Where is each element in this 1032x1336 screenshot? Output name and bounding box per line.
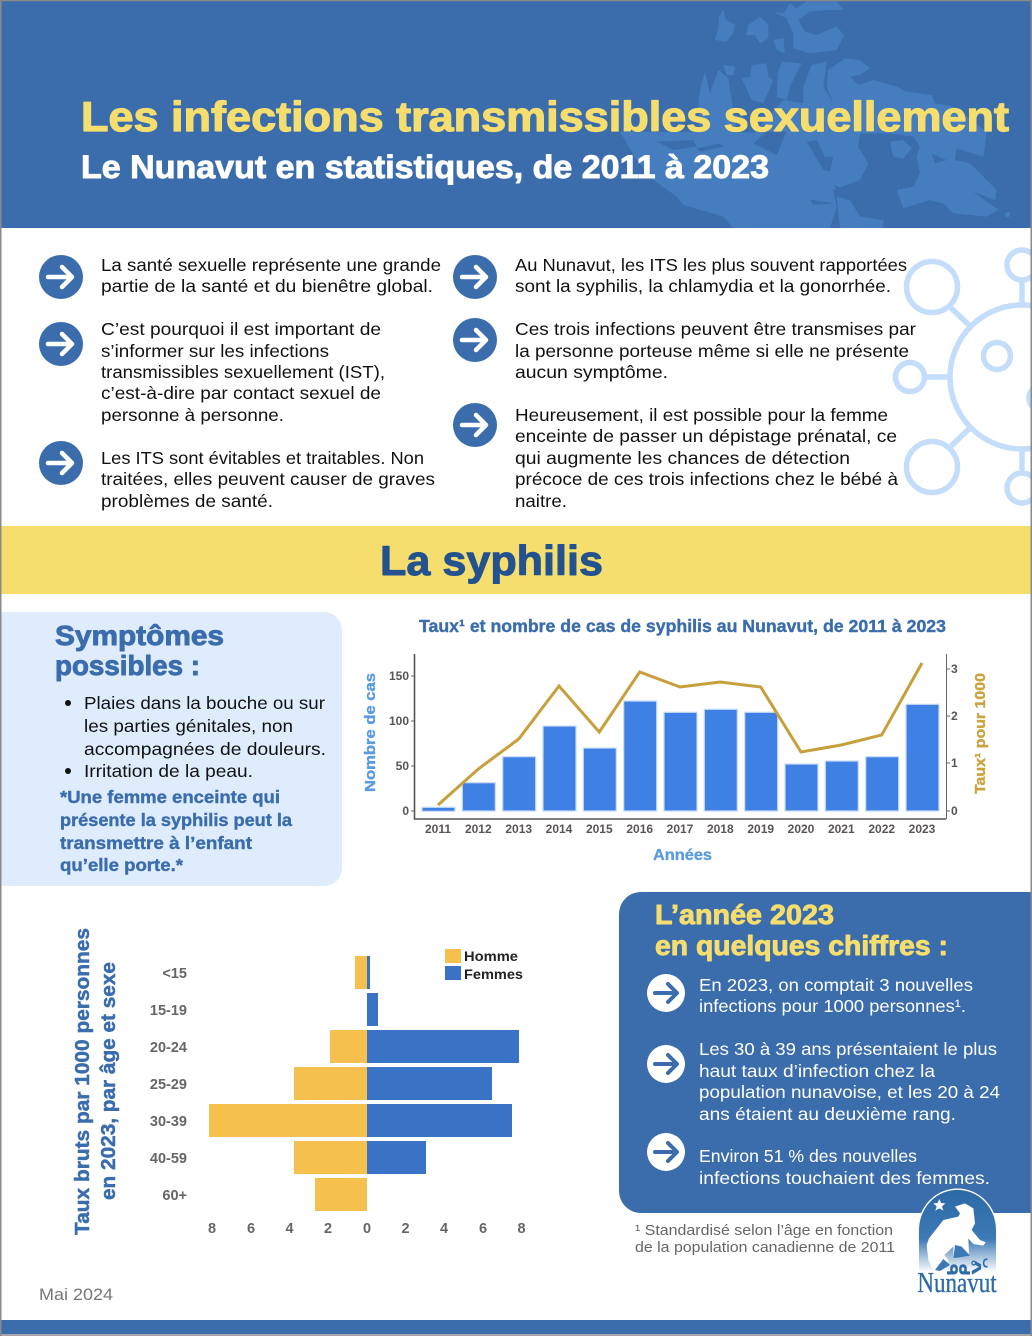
footer band — [0, 1320, 1032, 1334]
text: preventable and treatable: problèmes de santé. — [101, 491, 273, 511]
callout: pregnancy warning: qu’elle porte.* — [60, 855, 183, 875]
section banner: La syphilis: La syphilis — [380, 537, 603, 584]
text: preventable and treatable: Les ITS sont évitables et traitables. Non — [101, 448, 424, 468]
year labels — [425, 822, 936, 836]
text: why be informed: s’informer sur les infections — [101, 341, 329, 361]
age labels: 20-24 — [150, 1040, 187, 1056]
icon: arrow — [647, 974, 685, 1012]
text: most reported STIs: Au Nunavut, les ITS les plus souvent rapportées — [515, 255, 907, 275]
chart: syphilis rate and case count — [363, 616, 989, 864]
value axis labels: 4 — [440, 1221, 448, 1237]
value axis labels: 2 — [401, 1221, 410, 1237]
bars: women — [367, 956, 519, 1174]
year labels: 2011 — [425, 822, 451, 836]
value axis labels: 6 — [247, 1221, 255, 1237]
year labels: 2020 — [788, 822, 815, 836]
heading: symptoms: possibles : — [55, 650, 200, 681]
icon: arrow — [453, 318, 497, 362]
heading: 2023 in numbers — [655, 899, 948, 961]
chart: rates by age and sex pyramid — [72, 928, 526, 1237]
right axis labels: 0 — [951, 804, 958, 818]
line: rate per 1000 — [438, 663, 922, 805]
text: age groups: haut taux d’infection chez la — [699, 1061, 935, 1081]
header banner — [0, 0, 1032, 228]
year labels: 2018 — [707, 822, 734, 836]
age labels: 25-29 — [150, 1077, 187, 1093]
age labels: 60+ — [162, 1188, 187, 1204]
icon: arrow — [39, 441, 83, 485]
year labels: 2015 — [586, 822, 613, 836]
section banner: La syphilis — [0, 526, 1032, 594]
panel: 2023 in numbers — [619, 892, 1032, 1213]
date: Mai 2024 — [39, 1285, 113, 1304]
callout: pregnancy warning — [60, 787, 292, 875]
chart title: Taux¹ et nombre de cas de syphilis au Nunavut, de 2011 à 2023 — [419, 616, 946, 636]
left axis labels — [389, 669, 409, 818]
text: prenatal screening: qui augmente les chances de détection — [515, 448, 850, 468]
right axis labels — [951, 662, 958, 818]
value axis labels: 6 — [479, 1221, 487, 1237]
right axis labels: 2 — [951, 709, 958, 723]
heading: symptoms: Symptômes — [55, 620, 224, 651]
age labels: 15-19 — [150, 1003, 187, 1019]
icon: Nunavut logo: Nunavut — [917, 1268, 997, 1299]
value axis labels: 2 — [324, 1221, 332, 1237]
axes — [411, 654, 950, 819]
icon: Nunavut logo: ᓄᓇᕗᑦ — [947, 1255, 988, 1280]
icon: arrow — [39, 255, 83, 299]
text: sexual health: partie de la santé et du bienêtre global. — [101, 276, 433, 296]
symptom list: Plaies dans la bouche ou sur — [84, 693, 325, 713]
left axis labels: 50 — [396, 759, 409, 773]
symptom list: les parties génitales, non — [84, 716, 293, 736]
map of Nunavut — [620, 2, 1010, 228]
year labels: 2013 — [505, 822, 532, 836]
right axis labels: 1 — [951, 756, 958, 770]
text: share of women: infections touchaient des femmes. — [699, 1168, 990, 1188]
left axis labels: 0 — [402, 804, 409, 818]
heading: 2023 in numbers: en quelques chiffres : — [655, 930, 948, 961]
text: new infections — [699, 975, 973, 1016]
year labels: 2019 — [747, 822, 774, 836]
icon: arrow — [39, 322, 83, 366]
text: preventable and treatable — [101, 448, 435, 511]
symptom list: accompagnées de douleurs. — [84, 739, 326, 759]
text: prenatal screening: naitre. — [515, 491, 567, 511]
legend: Homme — [464, 949, 519, 964]
legend: Femmes — [464, 967, 523, 982]
text: prenatal screening: précoce de ces trois infections chez le bébé à — [515, 469, 898, 489]
subtitle: Le Nunavut en statistiques, de 2011 à 2023 — [81, 149, 769, 185]
text: most reported STIs: sont la syphilis, la chlamydia et la gonorrhée. — [515, 276, 891, 296]
icon: Nunavut logo — [917, 1189, 997, 1299]
icon: arrow — [647, 1133, 685, 1171]
callout: pregnancy warning: *Une femme enceinte qui — [60, 787, 280, 807]
callout: pregnancy warning: présente la syphilis peut la — [60, 810, 292, 830]
text: new infections: infections pour 1000 personnes¹. — [699, 996, 966, 1016]
axis title: number of cases: Nombre de cas — [363, 673, 379, 792]
text: why be informed: C’est pourquoi il est important de — [101, 319, 381, 339]
text: prenatal screening: enceinte de passer un dépistage prénatal, ce — [515, 426, 897, 446]
text: new infections: En 2023, on comptait 3 nouvelles — [699, 975, 973, 995]
year labels: 2017 — [667, 822, 694, 836]
icon: arrow — [453, 255, 497, 299]
year labels: 2016 — [626, 822, 653, 836]
value axis labels: 4 — [285, 1221, 294, 1237]
text: why be informed: transmissibles sexuellement (IST), — [101, 362, 385, 382]
text: asymptomatic transmission: Ces trois infections peuvent être transmises par — [515, 319, 916, 339]
text: sexual health — [101, 255, 441, 296]
title: Les infections transmissibles sexuellement — [81, 93, 1009, 140]
value axis labels: 8 — [208, 1221, 216, 1237]
year labels: 2012 — [465, 822, 492, 836]
chart title — [72, 928, 120, 1235]
year labels: 2021 — [828, 822, 855, 836]
text: asymptomatic transmission — [515, 319, 916, 382]
left axis labels: 150 — [389, 669, 409, 683]
value axis labels — [208, 1221, 526, 1237]
value axis labels: 0 — [363, 1221, 371, 1237]
axis title: years: Années — [653, 847, 712, 864]
footnote: ¹ Standardisé selon l’âge en fonction — [635, 1222, 893, 1239]
text: prenatal screening — [515, 405, 898, 511]
legend — [445, 949, 523, 982]
bars: men — [209, 956, 367, 1211]
text: why be informed: c’est-à-dire par contact sexuel de — [101, 383, 381, 403]
footnote — [635, 1222, 895, 1256]
symptom list — [65, 693, 326, 781]
text: asymptomatic transmission: la personne porteuse même si elle ne présente — [515, 341, 909, 361]
heading: symptoms — [55, 620, 224, 681]
age labels: 30-39 — [150, 1114, 187, 1130]
panel: introduction left column — [39, 255, 441, 511]
text: prenatal screening: Heureusement, il est possible pour la femme — [515, 405, 888, 425]
text: age groups: population nunavoise, et les 20 à 24 — [699, 1082, 1000, 1102]
chart title: Taux bruts par 1000 personnes — [72, 928, 94, 1235]
year labels: 2023 — [909, 822, 936, 836]
text: asymptomatic transmission: aucun symptôme. — [515, 362, 668, 382]
text: age groups: Les 30 à 39 ans présentaient le plus — [699, 1039, 997, 1059]
value axis labels: 8 — [517, 1221, 526, 1237]
title — [81, 93, 1009, 185]
left axis labels: 100 — [389, 714, 409, 728]
icon: arrow — [647, 1045, 685, 1083]
year labels: 2022 — [868, 822, 895, 836]
footnote: de la population canadienne de 2011 — [635, 1239, 895, 1256]
right axis labels: 3 — [951, 662, 958, 676]
year labels: 2014 — [546, 822, 573, 836]
text: why be informed: personne à personne. — [101, 405, 284, 425]
bars: number of cases — [422, 701, 939, 811]
callout: pregnancy warning: transmettre à l’enfant — [60, 833, 252, 853]
text: share of women: Environ 51 % des nouvelles — [699, 1146, 917, 1166]
text: most reported STIs — [515, 255, 907, 296]
icon: virus decoration — [896, 250, 1032, 503]
age labels — [150, 966, 187, 1204]
symptom list: Irritation de la peau. — [84, 761, 253, 781]
heading: 2023 in numbers: L’année 2023 — [655, 899, 834, 930]
chart title: en 2023, par âge et sexe — [98, 962, 120, 1200]
panel: possible symptoms — [0, 612, 342, 886]
icon: arrow — [453, 403, 497, 447]
text: age groups — [699, 1039, 1000, 1124]
panel: introduction right column — [453, 255, 916, 511]
axis title: rate: Taux¹ pour 1000 — [973, 673, 989, 794]
text: sexual health: La santé sexuelle représente une grande — [101, 255, 441, 275]
text: share of women — [699, 1146, 990, 1188]
age labels: <15 — [162, 966, 187, 982]
text: why be informed — [101, 319, 385, 425]
text: age groups: ans étaient au deuxième rang. — [699, 1104, 956, 1124]
text: preventable and treatable: traitées, elles peuvent causer de graves — [101, 469, 435, 489]
age labels: 40-59 — [150, 1151, 187, 1167]
